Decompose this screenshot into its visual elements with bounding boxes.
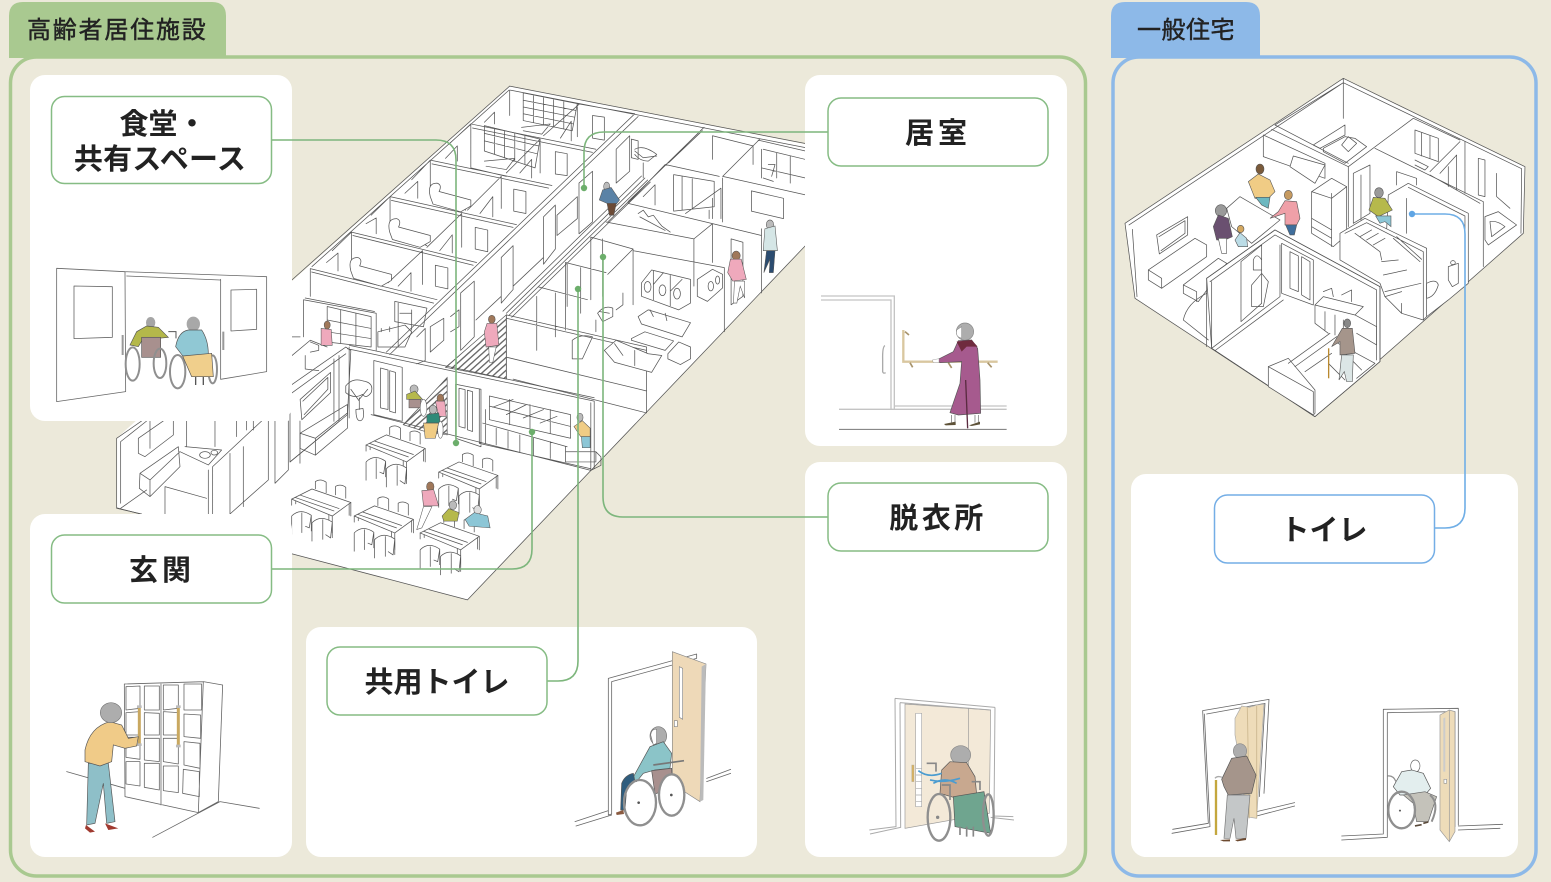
toilet enclosure xyxy=(1387,183,1468,317)
connector: 食堂 xyxy=(272,140,459,446)
label: 共用トイレ: 共用トイレ xyxy=(364,666,510,699)
right-hand rooms xyxy=(506,127,805,413)
label: 玄関: 玄関 xyxy=(129,554,195,587)
people in house xyxy=(1213,164,1392,382)
illustration: double doors with wheelchairs xyxy=(57,268,267,402)
lounge furniture xyxy=(638,310,691,337)
panel: トイレ (house) xyxy=(1131,474,1518,857)
panel: 食堂・共有スペース xyxy=(30,75,292,421)
person: care staff pink xyxy=(728,251,746,303)
label: 共用トイレ xyxy=(327,647,547,715)
door to corridor xyxy=(1353,165,1370,223)
illustration: hinged door with wheelchair xyxy=(1342,708,1503,842)
person: reception staff xyxy=(574,413,590,448)
person: green shirt in corridor xyxy=(1369,188,1392,227)
corridor doors and rails xyxy=(417,136,650,364)
person: child xyxy=(1235,225,1248,247)
person: staff pink shelves xyxy=(321,321,332,345)
connector: 共用トイレ xyxy=(547,286,581,681)
table and counter xyxy=(1227,197,1280,243)
people at dining table xyxy=(417,482,490,530)
plant: corridor xyxy=(635,148,657,178)
wheelchair group xyxy=(407,385,446,438)
label: トイレ: トイレ xyxy=(1280,515,1368,547)
staircase xyxy=(1340,218,1427,320)
hatched floor xyxy=(445,315,506,379)
bed xyxy=(1313,125,1367,163)
house walls back xyxy=(1125,78,1525,417)
person: blue shirt corridor xyxy=(599,182,620,215)
person: man cooking xyxy=(1248,164,1275,208)
panel: 共用トイレ xyxy=(306,627,757,857)
doors and coat xyxy=(1241,243,1313,322)
connector: 玄関 xyxy=(272,429,535,569)
illustration: folding door with cane xyxy=(1172,699,1295,841)
plant xyxy=(346,380,372,421)
label: トイレ xyxy=(1214,495,1434,563)
facility frame border xyxy=(10,57,1086,876)
entry shelf and shoe cabinet xyxy=(1315,288,1377,345)
upper lounge shelves xyxy=(290,298,427,371)
toilets and sinks xyxy=(572,293,623,359)
illustration: handrail and cane xyxy=(821,296,1007,429)
kitchen cabinets xyxy=(1263,135,1325,178)
person: staff pink centre xyxy=(484,315,499,362)
label: 脱衣所 xyxy=(828,483,1048,551)
panel: 高齢者居住施設 frame xyxy=(9,2,1086,876)
person: elderly at table xyxy=(1213,205,1232,253)
panel: 玄関 xyxy=(30,514,292,857)
dining tables xyxy=(366,426,425,487)
people in plan xyxy=(321,182,777,530)
person: woman with tray xyxy=(1270,190,1300,235)
lower-left room of plan xyxy=(117,421,300,514)
panel: 一般住宅 frame xyxy=(1111,2,1536,876)
person: visitor light blue xyxy=(763,220,777,273)
outer walls and room partitions xyxy=(117,86,805,600)
label: 脱衣所: 脱衣所 xyxy=(889,502,987,535)
connector: 脱衣所 xyxy=(600,254,828,517)
label: 居室: 居室 xyxy=(905,117,971,150)
label: 食堂・共有スペース xyxy=(52,96,272,184)
house frame border xyxy=(1113,57,1536,876)
entrance hall wall and floor xyxy=(1207,230,1380,417)
hatched entry xyxy=(403,377,447,435)
illustration: dressing room door xyxy=(869,698,1014,841)
dining walls xyxy=(290,347,351,462)
facility tab xyxy=(9,2,226,58)
isometric floor plan: facility xyxy=(117,86,805,600)
person: man with cane xyxy=(1329,319,1355,382)
closet xyxy=(1415,130,1438,170)
panel: 居室 xyxy=(805,75,1067,446)
grids and furniture in rooms xyxy=(484,93,577,170)
label: 玄関 xyxy=(52,535,272,603)
house tab xyxy=(1111,2,1260,58)
heading: house: 一般住宅 xyxy=(1137,17,1235,44)
connector: トイレ xyxy=(1409,211,1465,528)
connector: 居室 xyxy=(581,132,828,191)
label: 食堂・共有スペース: 共有スペース xyxy=(74,143,246,176)
sofas and TV xyxy=(1148,238,1207,288)
heading: facility: 高齢者居住施設 xyxy=(27,17,208,44)
panel: 脱衣所 xyxy=(805,462,1067,857)
bathroom xyxy=(1397,155,1517,245)
isometric plan: house xyxy=(1125,78,1525,417)
illustration: toilet door with wheelchair xyxy=(575,652,731,826)
illustration: lockers xyxy=(67,682,259,837)
label: 食堂・共有スペース: 食堂・ xyxy=(119,108,207,141)
washing machines xyxy=(642,270,691,310)
stairs xyxy=(638,210,670,232)
label: 居室 xyxy=(828,98,1048,166)
toilet and sink xyxy=(1427,263,1458,298)
